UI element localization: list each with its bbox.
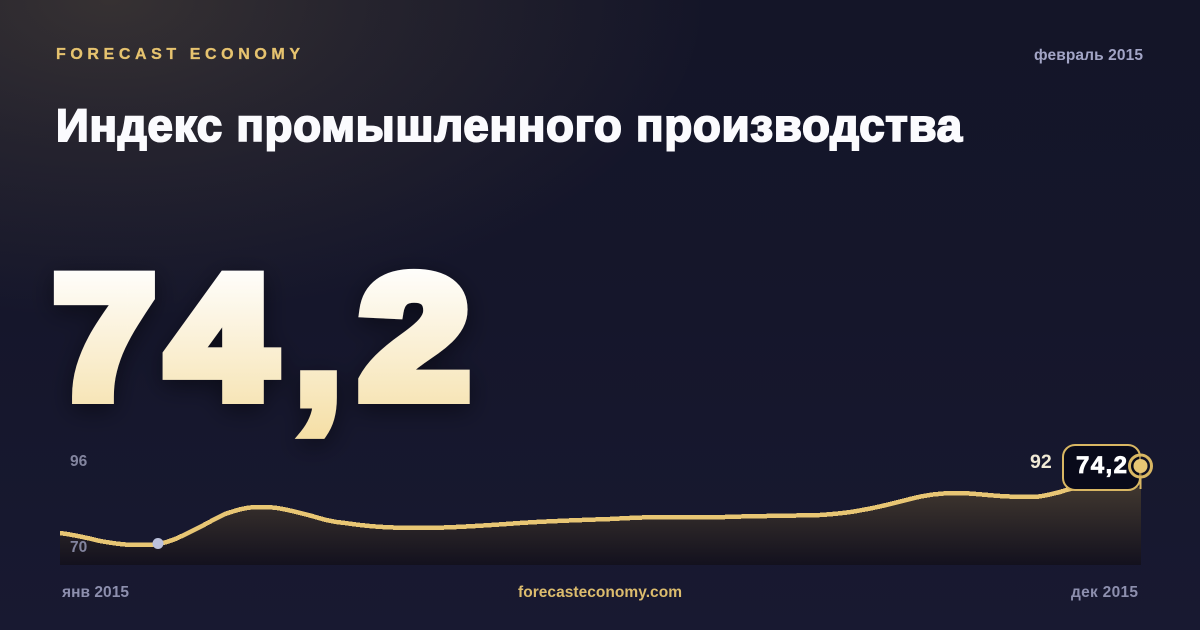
value badge: 74,2 [1076, 452, 1127, 479]
brand label: FORECAST ECONOMY [56, 46, 300, 63]
chart [60, 445, 1152, 565]
site url: forecasteconomy.com [518, 584, 682, 601]
big value: 2 [360, 242, 469, 434]
title: Индекс промышленного производства [56, 100, 963, 151]
peak label: 92 [1030, 451, 1052, 473]
value badge [1063, 445, 1140, 490]
date label: февраль 2015 [1034, 47, 1143, 64]
big value [54, 227, 469, 446]
axis label: max: 96 [70, 453, 88, 470]
min marker [152, 538, 164, 549]
big value: , [291, 227, 345, 446]
x label: end: дек 2015 [1071, 584, 1138, 601]
chart area fill [60, 487, 1141, 565]
big value: 7 [54, 242, 155, 434]
axis label: min: 70 [70, 539, 87, 556]
chart line [60, 487, 1080, 545]
big value: 4 [168, 242, 274, 434]
current value marker [1130, 455, 1152, 489]
x label: start: янв 2015 [62, 584, 129, 601]
